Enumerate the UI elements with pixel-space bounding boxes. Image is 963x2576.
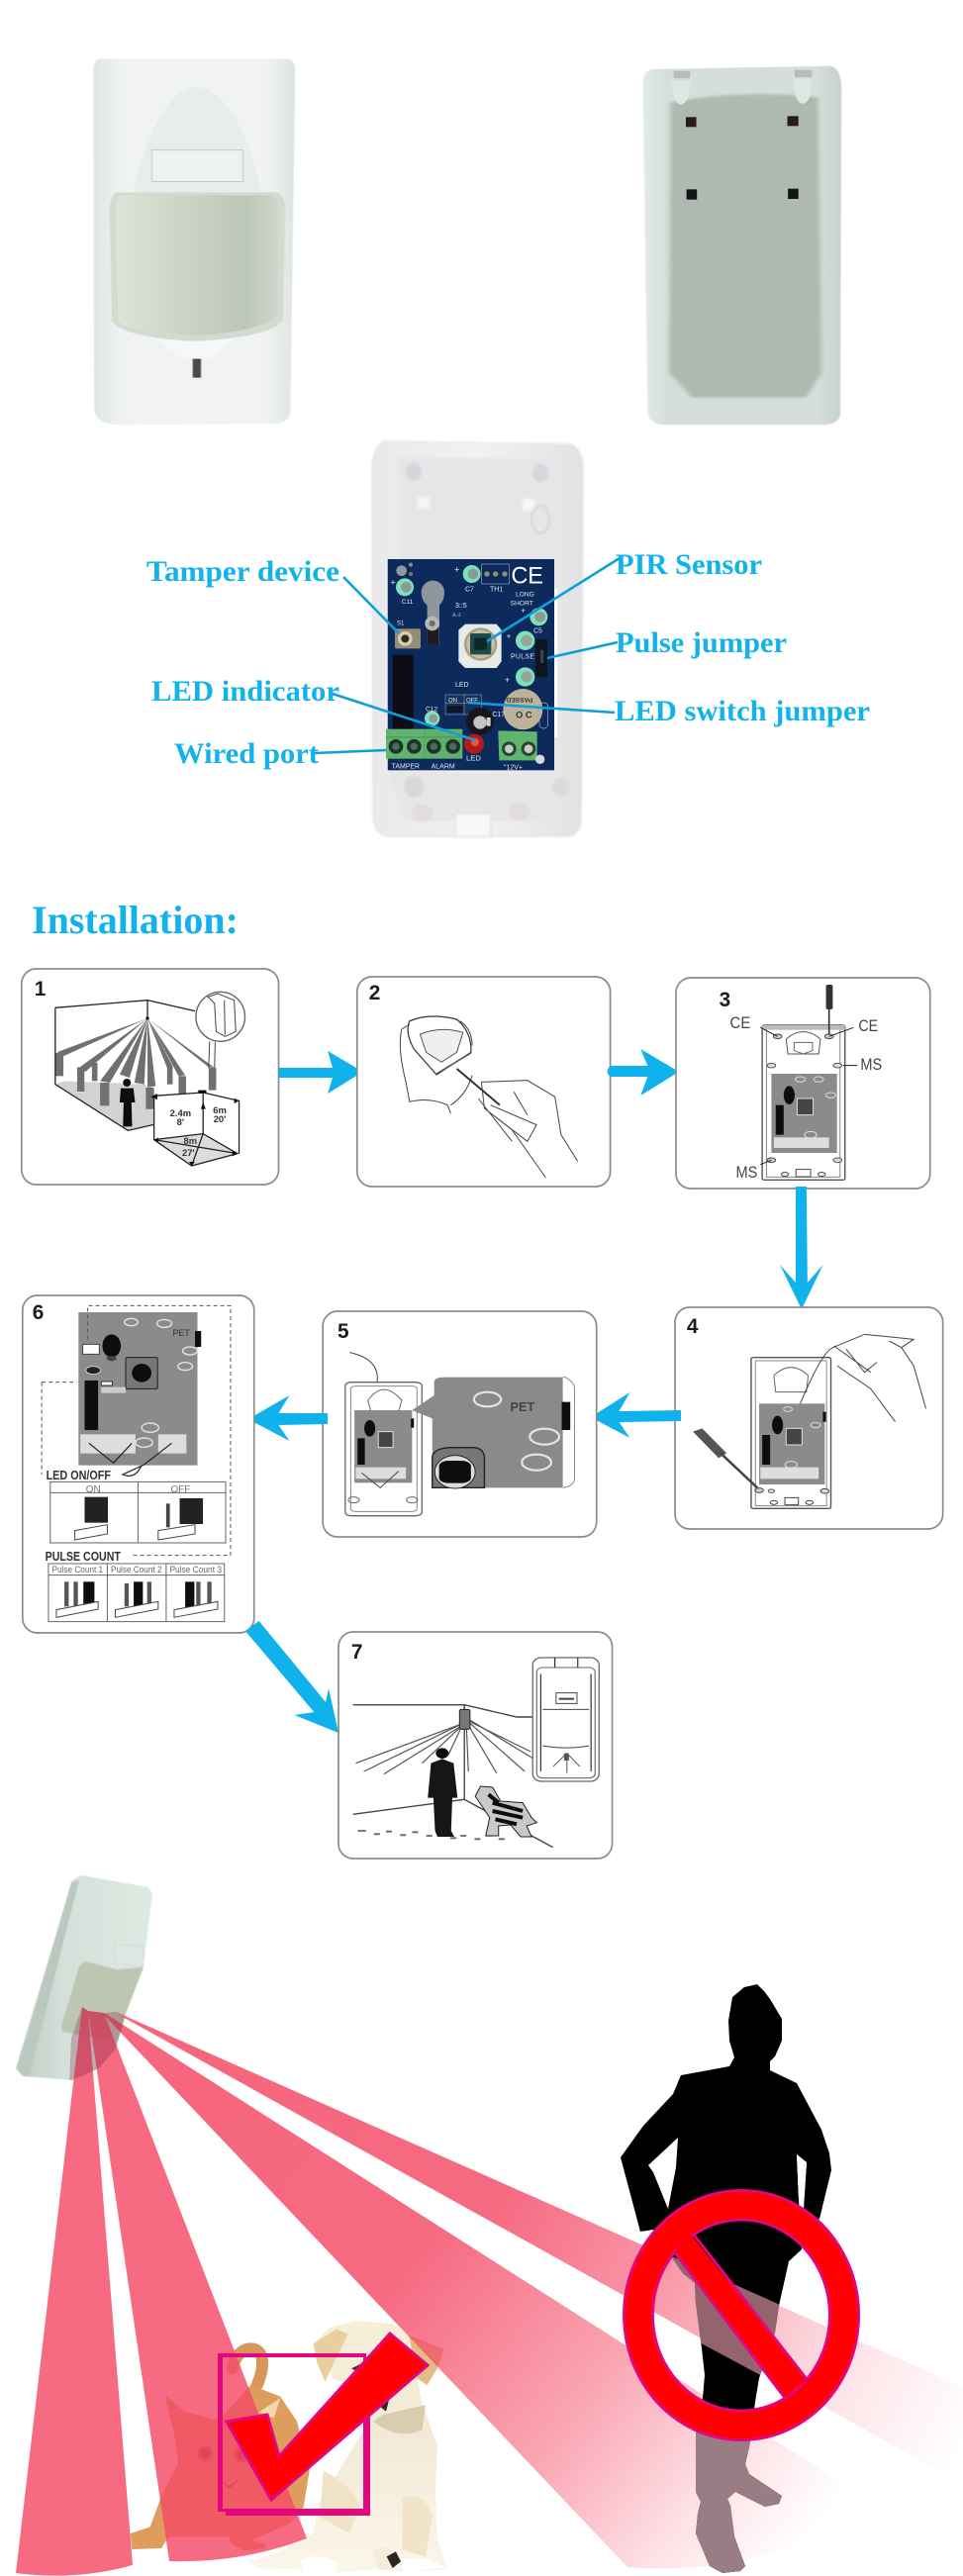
electrolytic capacitor bbox=[466, 708, 494, 735]
installation steps and arrows bbox=[22, 969, 943, 1859]
label: Tamper device: Tamper device bbox=[146, 555, 339, 588]
beam tint over legs bbox=[672, 2256, 782, 2573]
PIR sensor bbox=[458, 624, 502, 668]
board silk labels: JL-2 bbox=[452, 612, 461, 617]
step number 7: 7 bbox=[351, 1641, 362, 1664]
step 1 panel: coverage pattern: 27' bbox=[182, 1148, 195, 1159]
allowed tick box bbox=[218, 2353, 370, 2516]
dog bbox=[249, 2321, 447, 2572]
step 1 panel: coverage pattern: 20' bbox=[214, 1114, 226, 1125]
board silk labels: C5 bbox=[533, 627, 542, 634]
PET small label: PET bbox=[172, 1328, 190, 1338]
step 1 panel: coverage pattern: 2.4m bbox=[170, 1108, 191, 1119]
board silk labels: SHORT bbox=[511, 601, 533, 608]
board silk labels: 3::5 bbox=[455, 603, 467, 610]
TH1 bbox=[482, 564, 509, 584]
step 3 panel: screw locations: CE bbox=[730, 1013, 750, 1032]
arrow step 1 to 2 bbox=[279, 1051, 363, 1094]
prohibition sign bbox=[625, 2191, 859, 2440]
step 3 panel: screw locations: MS bbox=[735, 1163, 757, 1182]
arrow step 3 to 4 bbox=[780, 1187, 823, 1309]
sensing beam 3 bbox=[102, 2013, 871, 2568]
step number 5: 5 bbox=[337, 1320, 349, 1343]
board silk labels: LED bbox=[466, 753, 481, 762]
step number 4: 4 bbox=[687, 1315, 699, 1338]
step 1 panel: coverage pattern bbox=[22, 969, 279, 1185]
step 7 panel: person and pet test bbox=[338, 1632, 613, 1859]
circuit board: PASSED bbox=[506, 696, 532, 703]
red LED bbox=[464, 734, 484, 754]
step 4 panel: mounting bbox=[675, 1307, 943, 1529]
12V terminal bbox=[498, 730, 537, 760]
step 1 panel: coverage pattern: 6m bbox=[213, 1105, 227, 1116]
pulse count captions bbox=[52, 1565, 222, 1575]
step number 1: 1 bbox=[35, 978, 47, 1001]
board silk labels: + bbox=[505, 674, 510, 684]
board silk labels: OFF bbox=[466, 698, 478, 704]
circuit board: O C bbox=[516, 711, 532, 720]
keyhole bbox=[422, 581, 444, 645]
board silk labels: LED bbox=[455, 682, 469, 689]
LED jumper box bbox=[445, 695, 482, 715]
arrow step 5 to 6 bbox=[248, 1395, 328, 1441]
board silk labels: + bbox=[390, 578, 396, 588]
tamper switch bbox=[395, 628, 421, 648]
cat bbox=[131, 2348, 310, 2550]
board silk labels: S1 bbox=[397, 620, 405, 626]
arrow step 2 to 3 bbox=[608, 1049, 679, 1096]
board silk labels: C7 bbox=[465, 586, 474, 593]
CE mark: CE bbox=[511, 562, 543, 589]
step number 6: 6 bbox=[33, 1301, 44, 1324]
pulse count captions: Pulse Count 3 bbox=[169, 1565, 222, 1575]
board silk labels: ALARM bbox=[432, 764, 455, 771]
step 2 panel: opening the cover bbox=[357, 977, 611, 1187]
label: Wired port: Wired port bbox=[174, 737, 319, 770]
detection scene: pets pass, person triggers bbox=[16, 1875, 963, 2576]
board silk labels: TH1 bbox=[490, 586, 503, 593]
step 6 panel: LED and pulse settings bbox=[23, 1295, 254, 1633]
leader lines bbox=[315, 558, 620, 753]
arrow step 4 to 5 bbox=[591, 1392, 681, 1438]
step 1 panel: coverage pattern: 8m bbox=[184, 1136, 197, 1147]
label: LED indicator: LED indicator bbox=[151, 675, 339, 708]
LED ON/OFF label: LED ON/OFF bbox=[47, 1468, 111, 1482]
ON OFF captions: OFF bbox=[171, 1484, 190, 1495]
heading: Installation: Installation: bbox=[32, 898, 239, 942]
circuit board bbox=[386, 559, 557, 771]
step 3 panel: screw locations: MS bbox=[860, 1055, 882, 1074]
step 3 panel: screw locations: CE bbox=[858, 1016, 878, 1035]
step 1 panel: coverage pattern: 8' bbox=[177, 1117, 184, 1128]
PET label: PET bbox=[510, 1399, 534, 1414]
tilted detector bbox=[16, 1875, 152, 2080]
beam shade on detector bbox=[69, 2007, 125, 2080]
arrow step 6 to 7 bbox=[245, 1621, 338, 1733]
front view of PIR detector bbox=[93, 58, 295, 425]
board silk labels: "12V+ bbox=[504, 764, 523, 771]
board silk labels: C11 bbox=[402, 599, 414, 606]
board silk labels: ON bbox=[448, 698, 457, 704]
back view of PIR detector bbox=[642, 66, 841, 425]
board silk labels: PULSE bbox=[511, 654, 534, 661]
step 3 panel: screw locations bbox=[676, 978, 930, 1189]
label: PIR Sensor: PIR Sensor bbox=[616, 548, 762, 581]
open housing with circuit board bbox=[146, 441, 870, 837]
sensing beam 1 bbox=[16, 2007, 133, 2576]
board silk labels: TAMPER bbox=[392, 764, 420, 771]
board silk labels: + bbox=[454, 564, 459, 574]
PULSE COUNT label: PULSE COUNT bbox=[46, 1549, 121, 1564]
sensing beam 2 bbox=[88, 2011, 307, 2561]
sensing beam 4 bbox=[116, 2012, 963, 2484]
step number 2: 2 bbox=[369, 982, 380, 1004]
red tick bbox=[227, 2334, 428, 2500]
step 5 panel: pet jumper bbox=[323, 1311, 597, 1537]
capacitors bbox=[396, 565, 547, 726]
board silk labels: + bbox=[521, 606, 526, 615]
sticker bbox=[503, 689, 542, 729]
label: Pulse jumper: Pulse jumper bbox=[616, 626, 787, 659]
step number 3: 3 bbox=[720, 989, 730, 1011]
label: LED switch jumper: LED switch jumper bbox=[615, 695, 870, 727]
board silk labels: C17 bbox=[492, 712, 505, 718]
tamper alarm terminals bbox=[386, 729, 425, 759]
jumper bbox=[535, 639, 547, 677]
housing shell bbox=[372, 441, 583, 837]
relay bbox=[393, 655, 414, 729]
ON OFF captions: ON bbox=[86, 1484, 101, 1495]
pulse count captions: Pulse Count 1 bbox=[52, 1565, 103, 1575]
board silk labels: + bbox=[507, 631, 512, 640]
pulse count captions: Pulse Count 2 bbox=[111, 1565, 162, 1575]
ON OFF captions bbox=[86, 1484, 190, 1495]
board silk labels bbox=[390, 564, 542, 771]
board silk labels: C12 bbox=[426, 706, 438, 713]
board silk labels: LONG bbox=[516, 591, 534, 598]
person silhouette bbox=[621, 1984, 831, 2573]
